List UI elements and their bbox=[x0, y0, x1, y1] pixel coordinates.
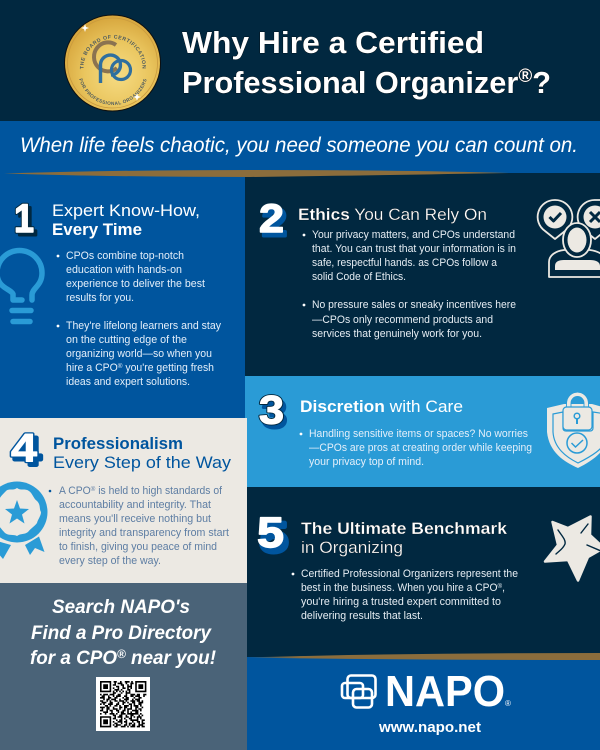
icon: certification medal: FOR PROFESSIONAL ORGANIZERS bbox=[79, 78, 146, 105]
heading 4: Professionalism bbox=[53, 434, 183, 453]
call to action bbox=[30, 597, 216, 669]
number 2: 2 bbox=[262, 201, 287, 245]
number 5: 5 bbox=[260, 514, 288, 562]
panel 2 background bbox=[245, 173, 600, 376]
heading 5: The Ultimate Benchmark bbox=[301, 519, 508, 538]
panel 1 bullets: ideas and expert solutions. bbox=[66, 376, 190, 388]
call to action: for a CPO bbox=[30, 648, 118, 669]
number 5 bbox=[257, 509, 288, 562]
panel 2 bullets: safe, respectful hands. as CPOs follow a bbox=[312, 257, 497, 269]
panel 1 bullets: education with hands-on bbox=[66, 264, 182, 276]
panel 1 bullets: you're getting fresh bbox=[122, 362, 214, 374]
call to action: Find a Pro Directory bbox=[31, 623, 212, 644]
number 1: 1 bbox=[14, 197, 34, 241]
panel 1 bullets: CPOs combine top-notch bbox=[66, 250, 184, 262]
number 3: 3 bbox=[259, 388, 284, 432]
header band bbox=[0, 0, 600, 121]
panel 4 bullets: accountability and integrity. That bbox=[59, 499, 211, 511]
registered mark: ® bbox=[505, 699, 511, 708]
panel 4: professionalism bbox=[0, 426, 232, 567]
icon: NAPO overlapping squares bbox=[342, 676, 376, 708]
footer: NAPO logo bbox=[342, 667, 511, 736]
number 4: 4 bbox=[11, 426, 38, 470]
panel 2 bullets bbox=[303, 229, 516, 340]
panel 4 bullets: to finish, giving you peace of mind bbox=[59, 541, 217, 553]
panel 5 background bbox=[247, 487, 600, 657]
heading 1: Every Time bbox=[52, 220, 142, 239]
panel 5 bullets bbox=[292, 568, 518, 622]
call to action: Search NAPO's bbox=[52, 597, 190, 618]
QR code bbox=[96, 677, 150, 731]
panel 1 bullets: on the cutting edge of the bbox=[66, 334, 187, 346]
number 4: 4 bbox=[14, 430, 42, 474]
panel 5 bullets: ® bbox=[497, 582, 502, 590]
title bbox=[182, 25, 551, 100]
panel 5 bullets: you're hiring a trusted expert committed to bbox=[301, 596, 501, 608]
panel 3: discretion bbox=[259, 388, 600, 468]
panel 2 bullets: services that genuinely work for you. bbox=[312, 328, 482, 340]
panel 2 bullets: that. You can trust that your information is in bbox=[312, 243, 516, 255]
panel 1 bullets: ® bbox=[118, 362, 123, 370]
gold swoosh lower bbox=[247, 653, 600, 660]
panel 5: ultimate benchmark bbox=[257, 509, 600, 622]
heading 4 bbox=[53, 434, 232, 472]
icon: light bulb bbox=[0, 250, 42, 322]
title: Professional Organizer bbox=[182, 65, 521, 100]
icon: star bbox=[545, 516, 600, 580]
panel 5 bullets: best in the business. When you hire a CPO bbox=[301, 582, 504, 594]
panel 5 bullets: , bbox=[502, 582, 505, 594]
panel 2 bullets: No pressure sales or sneaky incentives here bbox=[312, 299, 516, 311]
title: ? bbox=[532, 65, 551, 100]
icon: shield with padlock bbox=[547, 392, 600, 468]
call to action background bbox=[0, 583, 247, 750]
tagline: When life feels chaotic, you need someone you can count on. bbox=[20, 134, 578, 157]
number 1: 1 bbox=[17, 200, 37, 244]
number 4: 4 bbox=[11, 426, 38, 470]
number 5: 5 bbox=[257, 509, 284, 557]
panel 1: expert know-how bbox=[0, 197, 222, 388]
gold swoosh upper bbox=[4, 170, 510, 177]
footer background bbox=[247, 657, 600, 750]
panel 4 bullets: integrity and transparency from start bbox=[59, 527, 229, 539]
panel 3 background bbox=[245, 376, 600, 487]
number 3: 3 bbox=[259, 388, 284, 432]
panel 1 bullets: They're lifelong learners and stay bbox=[66, 320, 222, 332]
panel 2 bullets: —CPOs only recommend products and bbox=[312, 314, 493, 326]
website: www.napo.net bbox=[378, 720, 481, 736]
panel 2: ethics bbox=[259, 197, 600, 340]
heading 1: Expert Know-How, bbox=[52, 201, 200, 220]
icon: certification medal bbox=[64, 14, 161, 112]
panel 4 bullets: A CPO bbox=[59, 485, 91, 497]
panel 1 bullets bbox=[57, 250, 222, 388]
panel 1 bullets: organizing world—so when you bbox=[66, 348, 212, 360]
panel 4 background bbox=[0, 418, 247, 583]
panel 3 bullets bbox=[300, 428, 532, 468]
panel 2 bullets: solid Code of Ethics. bbox=[312, 271, 406, 283]
panel 2 bullets: Your privacy matters, and CPOs understand bbox=[312, 229, 515, 241]
panel 5 bullets: Certified Professional Organizers represent the bbox=[301, 568, 518, 580]
panel 4 bullets bbox=[49, 485, 229, 567]
panel 4 bullets: is held to high standards of bbox=[95, 485, 222, 497]
panel 4 bullets: ® bbox=[91, 485, 96, 493]
number 2: 2 bbox=[259, 197, 284, 241]
NAPO wordmark: NAPO bbox=[385, 667, 505, 716]
heading 3: Discretion with Care bbox=[300, 397, 463, 416]
panel 1 bullets: experience to deliver the best bbox=[66, 278, 205, 290]
title: ® bbox=[518, 66, 532, 87]
call to action: near you! bbox=[126, 648, 216, 669]
heading 5: in Organizing bbox=[301, 538, 403, 557]
panel 4 bullets: every step of the way. bbox=[59, 555, 161, 567]
icon: certification medal: THE BOARD OF CERTIFICATION bbox=[80, 34, 146, 70]
panel 1 background bbox=[0, 177, 245, 418]
panel 3 bullets: your privacy top of mind. bbox=[309, 456, 424, 468]
panel 4 bullets: means you'll receive nothing but bbox=[59, 513, 211, 525]
heading 2: Ethics You Can Rely On bbox=[298, 205, 487, 224]
tagline band bbox=[0, 121, 600, 177]
heading 1 bbox=[52, 201, 200, 239]
panel 5 bullets: delivering results that last. bbox=[301, 610, 423, 622]
icon: person with check and cross bubbles bbox=[538, 200, 600, 277]
panel 3 bullets: Handling sensitive items or spaces? No worries bbox=[309, 428, 528, 440]
heading 4: Every Step of the Way bbox=[53, 453, 232, 472]
panel 1 bullets: hire a CPO bbox=[66, 362, 118, 374]
number 4 bbox=[11, 426, 42, 474]
icon: award ribbon bbox=[0, 482, 48, 559]
number 1: 1 bbox=[14, 197, 34, 241]
panel 1 bullets: results for you. bbox=[66, 292, 134, 304]
panel 3 bullets: —CPOs are pros at creating order while keeping bbox=[309, 442, 532, 454]
heading 5 bbox=[301, 519, 508, 557]
call to action: ® bbox=[117, 647, 126, 661]
number 3: 3 bbox=[262, 392, 287, 436]
title: Why Hire a Certified bbox=[182, 25, 484, 60]
